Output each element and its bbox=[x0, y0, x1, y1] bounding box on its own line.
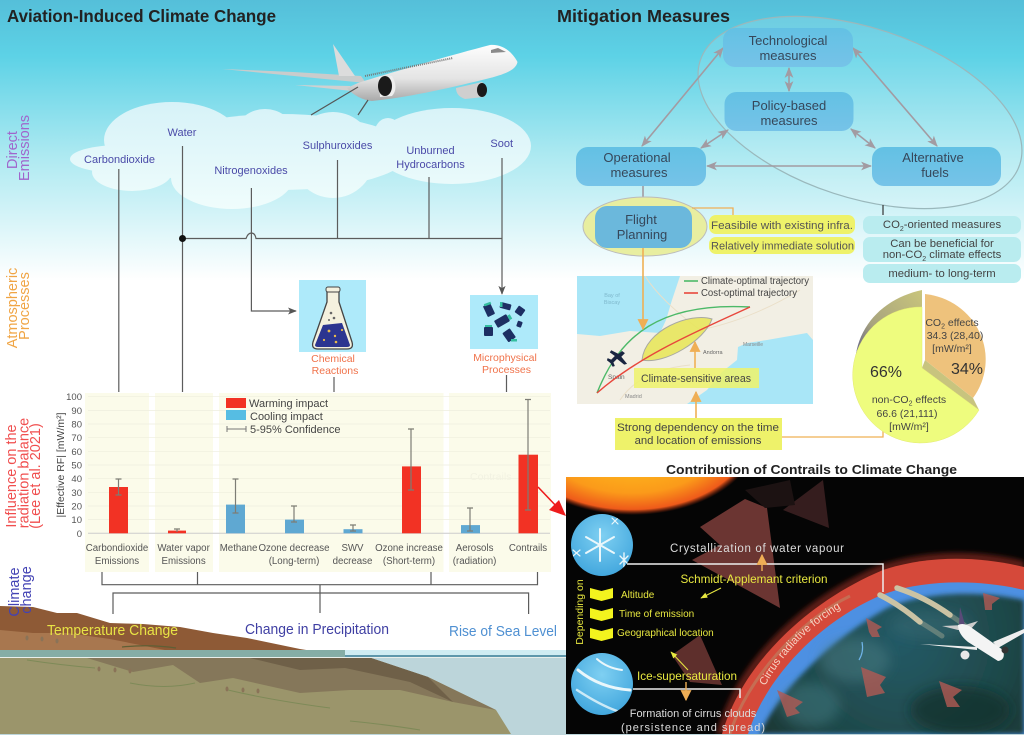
arrow: contrails to photo bbox=[538, 487, 566, 516]
label: depending on: Depending on bbox=[574, 579, 586, 645]
icon: chemical flask bbox=[299, 280, 366, 352]
note: CO2-oriented measures: -oriented measures bbox=[904, 219, 1001, 231]
section label: influence on the radiation balance: Influence on the bbox=[4, 424, 20, 528]
emission labels bbox=[84, 127, 513, 177]
factor chevrons bbox=[590, 588, 613, 641]
note: beneficial for non-CO2 effects: Can be beneficial for bbox=[890, 238, 994, 250]
y axis ticks bbox=[66, 392, 82, 540]
pie chart: CO2 vs non-CO2 effects bbox=[853, 290, 986, 443]
callout: climate-sensitive areas bbox=[634, 368, 759, 388]
emission labels: Sulphuroxides bbox=[303, 140, 373, 152]
section label: atmospheric processes: Processes bbox=[17, 272, 33, 340]
trajectory map: Marseille bbox=[743, 342, 763, 348]
brackets to climate change bbox=[102, 572, 538, 614]
note: medium- to long-term: medium- to long-term bbox=[888, 268, 996, 280]
chart legend bbox=[226, 398, 341, 436]
arrow: supersaturation to factors bbox=[671, 652, 688, 670]
trajectory map: Bay of bbox=[604, 293, 620, 299]
flight planning node: Flight bbox=[625, 212, 657, 227]
mitigation arrows bbox=[642, 48, 937, 166]
factor labels: Altitude bbox=[621, 590, 655, 601]
chart legend: Cooling impact bbox=[250, 411, 323, 423]
factor labels: Geographical location bbox=[617, 628, 714, 639]
orange arrow: label to sensitive area bbox=[694, 342, 696, 368]
trajectory map bbox=[577, 276, 813, 404]
box: technological measures: measures bbox=[759, 48, 817, 63]
note: relatively immediate solution: Relatively immediate solution bbox=[711, 240, 854, 252]
map legend: Cost-optimal trajectory bbox=[701, 288, 797, 299]
arrow: supersaturation to cirrus formation bbox=[685, 682, 687, 700]
flight planning node: Planning bbox=[617, 227, 667, 242]
x axis labels: Carbondioxide bbox=[86, 543, 148, 554]
icon: airplane bbox=[222, 44, 518, 115]
climate-optimal trajectory bbox=[597, 307, 750, 393]
arrow: criterion to crystallization bbox=[761, 555, 763, 571]
y axis ticks: 20 bbox=[71, 502, 82, 512]
x axis labels: Emissions bbox=[95, 556, 139, 567]
emission labels: Soot bbox=[490, 138, 513, 150]
y axis ticks: 70 bbox=[71, 433, 82, 444]
pie chart: CO2 vs non-CO2 effects: CO bbox=[925, 317, 941, 329]
y axis ticks: 60 bbox=[71, 447, 82, 458]
label: rise of sea level: Rise of Sea Level bbox=[449, 624, 557, 640]
contrails photo panel bbox=[566, 477, 1024, 734]
box: technological measures: Technological bbox=[749, 33, 827, 48]
label: formation of cirrus clouds: Formation of cirrus clouds bbox=[630, 708, 757, 720]
map legend bbox=[684, 276, 809, 299]
section label: direct emissions: Emissions bbox=[17, 115, 33, 181]
x axis labels bbox=[86, 543, 547, 567]
note: CO2-oriented measures: 2 bbox=[900, 226, 904, 233]
label: chemical reactions bbox=[311, 353, 358, 377]
x axis labels: decrease bbox=[333, 556, 372, 567]
chart legend: 5-95% Confidence bbox=[250, 424, 341, 436]
junction dot bbox=[179, 235, 186, 242]
y axis ticks: 10 bbox=[71, 515, 82, 526]
section label: direct emissions: Direct bbox=[5, 131, 21, 169]
orange arrow: flight planning to map bbox=[642, 248, 644, 329]
callout: strong dependency: Strong dependency on the time bbox=[617, 422, 779, 434]
y axis ticks: 0 bbox=[77, 529, 82, 540]
box: technological measures bbox=[723, 28, 853, 67]
emission labels: Hydrocarbons bbox=[396, 159, 465, 171]
y axis ticks: 90 bbox=[71, 406, 82, 417]
box: policy-based measures: Policy-based bbox=[752, 98, 826, 113]
label: temperature change: Temperature Change bbox=[47, 623, 178, 639]
section label: atmospheric processes bbox=[5, 268, 33, 348]
chart panel backgrounds bbox=[85, 393, 551, 572]
icon: contrail airliner bbox=[920, 607, 1024, 661]
main title: mitigation measures: Mitigation Measures bbox=[557, 6, 730, 26]
solar radiation arrows bbox=[672, 480, 829, 685]
pie chart: CO2 vs non-CO2 effects: 34% bbox=[951, 361, 983, 378]
x axis labels: (Long-term) bbox=[269, 556, 319, 567]
chart legend: Warming impact bbox=[249, 398, 328, 410]
label: microphysical processes bbox=[473, 352, 537, 376]
emissions cloud bbox=[70, 102, 531, 209]
coastal landscape bbox=[0, 606, 1024, 735]
box: policy-based measures bbox=[724, 92, 854, 131]
arrow: criterion to factors bbox=[701, 588, 721, 598]
box: alternative fuels bbox=[872, 147, 1001, 186]
x axis labels: (Short-term) bbox=[383, 556, 435, 567]
x axis labels: Ozone increase bbox=[375, 543, 443, 554]
outgoing radiation arrows bbox=[777, 593, 1000, 717]
section label: influence on the radiation balance: (Lee et al. 2021) bbox=[28, 423, 44, 529]
label: change in precipitation: Change in Precipitation bbox=[245, 622, 389, 638]
label: crystallization of water vapour: Crystallization of water vapour bbox=[670, 543, 844, 555]
mitigation grouping ellipse bbox=[674, 0, 1024, 245]
label: schmidt-applemant criterion: Schmidt-Applemant criterion bbox=[680, 572, 828, 586]
flight planning node bbox=[583, 197, 707, 256]
note: CO2-oriented measures bbox=[863, 216, 1021, 234]
y axis title: |Effective RF| [mW/m²] bbox=[55, 412, 67, 518]
climate-sensitive area bbox=[642, 317, 712, 361]
box: operational measures bbox=[576, 147, 706, 186]
factor labels bbox=[617, 590, 714, 639]
pie chart: CO2 vs non-CO2 effects: 66% bbox=[870, 364, 902, 381]
note: CO2-oriented measures: CO bbox=[883, 219, 900, 231]
pie chart: CO2 vs non-CO2 effects: 2 bbox=[909, 400, 913, 408]
trajectory map: Andorra bbox=[703, 350, 724, 356]
pie chart: CO2 vs non-CO2 effects: effects bbox=[945, 317, 979, 329]
icon: snowflake circle bbox=[571, 514, 633, 576]
x axis labels: Aerosols bbox=[456, 543, 494, 554]
orange connector: dependency to pie bbox=[782, 430, 883, 437]
emission flow lines bbox=[119, 146, 507, 392]
section label: influence on the radiation balance bbox=[4, 418, 44, 529]
label: formation of cirrus clouds: (persistence and spread) bbox=[621, 722, 765, 734]
icon: small plane bbox=[607, 350, 627, 367]
box: alternative fuels: fuels bbox=[921, 165, 949, 180]
orange arrow: dependency to callout bbox=[695, 392, 697, 418]
sun bbox=[566, 477, 738, 514]
ghost label: contrails: Contrails bbox=[470, 471, 511, 483]
earth and atmosphere bbox=[716, 553, 1024, 734]
pie chart: CO2 vs non-CO2 effects: 66.6 (21,111) bbox=[877, 408, 937, 420]
note: medium- to long-term bbox=[863, 264, 1021, 283]
x axis labels: Water vapor bbox=[157, 543, 211, 554]
emission labels: Water bbox=[168, 127, 197, 139]
label: chemical reactions: Chemical bbox=[311, 353, 355, 365]
box: policy-based measures: measures bbox=[760, 113, 818, 128]
arrow: operational to flight planning bbox=[642, 186, 644, 207]
trajectory map: Madrid bbox=[625, 394, 642, 400]
section label: direct emissions bbox=[5, 115, 33, 181]
error bars bbox=[116, 400, 531, 532]
cost-optimal trajectory bbox=[597, 307, 750, 393]
emission labels: Unburned bbox=[406, 145, 455, 157]
label: formation of cirrus clouds bbox=[621, 708, 765, 734]
box: alternative fuels: Alternative bbox=[902, 150, 964, 165]
callout: strong dependency: and location of emissions bbox=[635, 435, 762, 447]
note: feasible with existing infrastructure bbox=[709, 215, 855, 234]
x axis labels: Ozone decrease bbox=[258, 543, 330, 554]
box: operational measures: Operational bbox=[603, 150, 671, 165]
callout: climate-sensitive areas: Climate-sensitive areas bbox=[641, 373, 751, 385]
pie chart: CO2 vs non-CO2 effects: [mW/m²] bbox=[889, 421, 929, 433]
note: relatively immediate solution bbox=[709, 237, 855, 254]
box: operational measures: measures bbox=[610, 165, 668, 180]
pie chart: CO2 vs non-CO2 effects: [mW/m²] bbox=[932, 343, 972, 355]
contrail streaks bbox=[880, 588, 968, 636]
orange connector: flight planning to notes bbox=[692, 208, 733, 215]
emission labels: Carbondioxide bbox=[84, 154, 155, 166]
note: beneficial for non-CO2 effects: climate effects bbox=[926, 249, 1002, 261]
y axis ticks: 50 bbox=[71, 460, 82, 472]
pie chart: CO2 vs non-CO2 effects: non-CO bbox=[872, 394, 909, 406]
pie chart: CO2 vs non-CO2 effects: effects bbox=[912, 394, 946, 406]
pie chart: CO2 vs non-CO2 effects: 34.3 (28,40) bbox=[927, 330, 983, 342]
x axis labels: Emissions bbox=[162, 556, 206, 567]
section label: atmospheric processes: Atmospheric bbox=[5, 268, 21, 348]
icon: microphysical particles bbox=[470, 295, 538, 349]
x axis labels: Methane bbox=[220, 543, 257, 554]
section label: influence on the radiation balance: radiation balance bbox=[16, 418, 32, 528]
factor labels: Time of emission bbox=[619, 609, 694, 620]
trajectory map: Spain bbox=[608, 374, 625, 381]
note: beneficial for non-CO2 effects: 2 bbox=[922, 256, 926, 263]
note: beneficial for non-CO2 effects: non-CO bbox=[883, 249, 922, 261]
heading: contribution of contrails: Contribution of Contrails to Climate Change bbox=[666, 462, 957, 477]
x axis labels: SWV bbox=[341, 543, 364, 554]
note: beneficial for non-CO2 effects bbox=[863, 237, 1021, 263]
bars bbox=[109, 455, 538, 533]
label: cirrus radiative forcing: Cirrus radiative forcing bbox=[760, 604, 841, 684]
y axis ticks: 40 bbox=[71, 474, 82, 485]
y axis ticks: 100 bbox=[66, 392, 82, 403]
map legend: Climate-optimal trajectory bbox=[701, 276, 809, 287]
tick from ellipse to CO2 notes bbox=[882, 205, 884, 215]
emission labels: Nitrogenoxides bbox=[214, 165, 288, 177]
sky background bbox=[0, 0, 1024, 280]
section label: climate change: Climate bbox=[7, 567, 23, 617]
trajectory map: Biscay bbox=[604, 300, 620, 306]
label: ice-supersaturation: Ice-supersaturation bbox=[637, 669, 737, 683]
earth surface texture bbox=[780, 611, 1010, 734]
label: microphysical processes: Processes bbox=[482, 364, 531, 376]
callout: strong dependency bbox=[615, 418, 782, 450]
section label: climate change bbox=[7, 566, 35, 617]
icon: cirrus clouds circle bbox=[571, 653, 633, 715]
note: feasible with existing infrastructure: Feasibile with existing infra. bbox=[711, 220, 853, 232]
label: microphysical processes: Microphysical bbox=[473, 352, 537, 364]
main title: aviation-induced climate change: Aviation-Induced Climate Change bbox=[7, 6, 276, 26]
section label: climate change: change bbox=[19, 566, 35, 614]
connector lines bbox=[627, 564, 883, 698]
x axis labels: (radiation) bbox=[453, 556, 496, 567]
y axis ticks: 30 bbox=[71, 488, 82, 499]
label: chemical reactions: Reactions bbox=[312, 365, 358, 377]
radiative forcing bar chart bbox=[55, 392, 551, 572]
pie chart: CO2 vs non-CO2 effects: 2 bbox=[941, 324, 945, 330]
y axis ticks: 80 bbox=[71, 420, 82, 430]
x axis labels: Contrails bbox=[509, 543, 547, 554]
